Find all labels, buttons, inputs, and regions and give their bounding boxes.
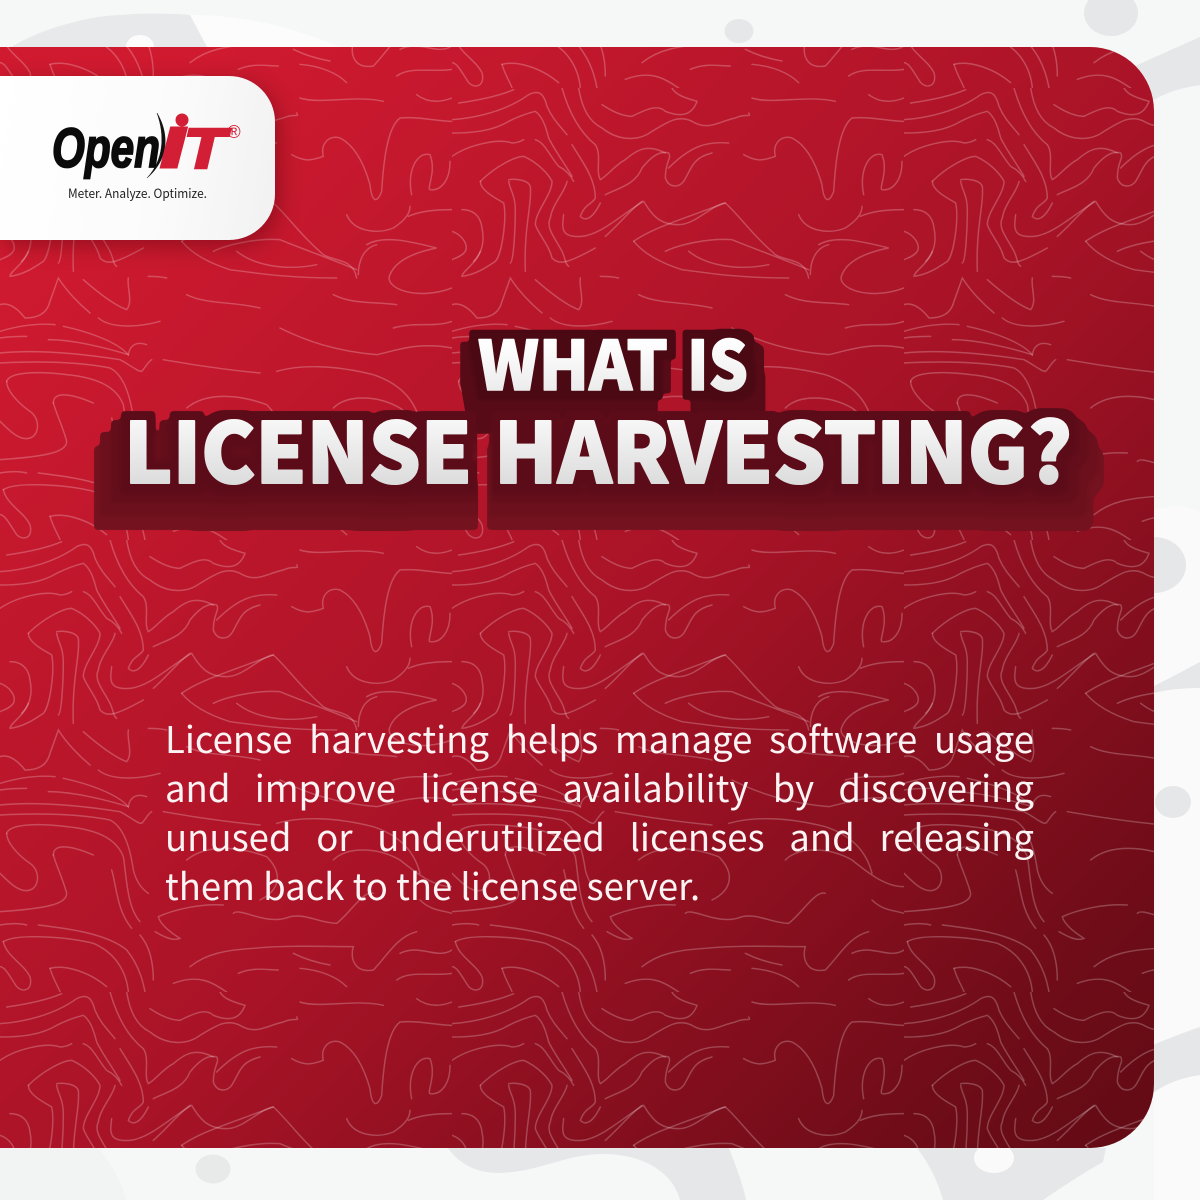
title <box>124 311 1072 507</box>
logo dot <box>176 114 188 126</box>
logo wordmark: iT: i <box>160 100 190 184</box>
logo card <box>0 76 275 240</box>
tagline: Meter. Analyze. Optimize. <box>68 183 207 202</box>
body text <box>165 711 1034 911</box>
logo wordmark: Open: Open <box>52 116 160 179</box>
title line: what is: IS <box>687 311 748 410</box>
title line: license harvesting: HARVESTING? <box>494 387 1072 507</box>
registered mark: ® <box>227 122 241 142</box>
logo wordmark: iT <box>160 126 232 170</box>
logo wordmark: iT: T <box>184 116 231 180</box>
title line: license harvesting <box>124 387 1072 507</box>
title line: license harvesting: LICENSE <box>124 387 472 507</box>
body text: License harvesting helps manage software usage <box>165 711 1034 764</box>
title line: what is: WHAT <box>478 311 668 410</box>
body text: unused or underutilized licenses and releasing <box>165 809 1034 862</box>
body text: them back to the license server. <box>165 858 700 911</box>
body text: and improve license availability by discovering <box>165 760 1034 813</box>
logo arc <box>147 113 165 178</box>
